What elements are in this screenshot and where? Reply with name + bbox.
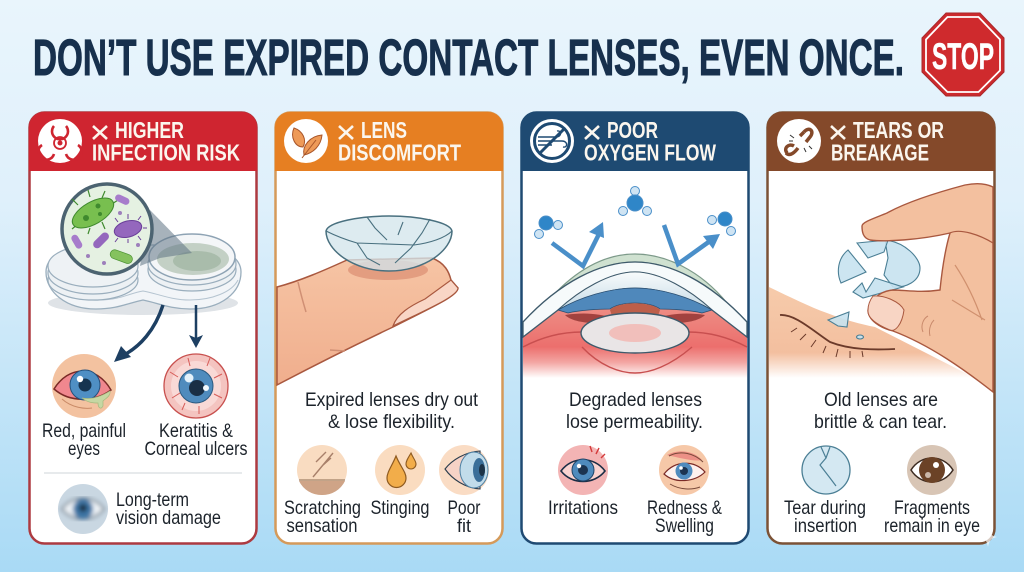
label: scratching sensation: sensation (286, 515, 358, 537)
label: tear during insertion: insertion (794, 515, 857, 537)
heading: tears or breakage (831, 117, 944, 166)
label: long-term vision damage: vision damage (116, 508, 221, 529)
heading: poor oxygen flow (584, 117, 717, 166)
label: poor fit: fit (457, 516, 471, 536)
icon: corner sparkle (979, 527, 997, 547)
panel header: discomfort (275, 112, 503, 171)
label: keratitis and corneal ulcers (144, 420, 248, 460)
arrow: to red eyes (114, 305, 163, 362)
text: expired lenses: & lose flexibility. (328, 411, 455, 433)
icon: blurred vision eye (58, 484, 108, 534)
label: irritations: Irritations (548, 497, 618, 519)
arrow: oxygen deflected right (664, 225, 720, 264)
panel header: oxygen (521, 112, 749, 171)
label: scratching sensation: Scratching (284, 497, 361, 519)
icon: broken chain (777, 119, 821, 163)
arrow: oxygen deflected left (552, 222, 604, 266)
label: long-term vision damage (116, 490, 221, 529)
label: keratitis and corneal ulcers: Corneal ulcers (144, 438, 248, 460)
heading: tears or breakage: TEARS OR (853, 117, 944, 143)
panel: tears or breakage (767, 112, 995, 544)
icon: stinging drops (375, 445, 425, 495)
cracked lens (326, 216, 452, 271)
text: expired lenses (305, 389, 479, 433)
icon: stop sign (922, 13, 1004, 96)
bacteria (68, 190, 147, 265)
label: redness and swelling: Swelling (655, 515, 714, 537)
heading: lens discomfort (338, 117, 461, 166)
heading: tears or breakage: BREAKAGE (831, 140, 929, 166)
label: fragments remain in eye: Fragments (894, 497, 970, 519)
label: scratching sensation (284, 497, 361, 537)
lens fragments (828, 240, 920, 339)
icon: dry leaves (284, 119, 328, 163)
heading: higher infection risk: HIGHER (115, 117, 184, 143)
text: expired lenses: Expired lenses dry out (305, 389, 479, 411)
arrow: to keratitis (189, 305, 203, 348)
text: degraded lenses (566, 389, 703, 433)
illustration: eye cross-section with lens (523, 254, 747, 378)
heading: poor oxygen flow: POOR (607, 117, 658, 143)
label: red, painful eyes: eyes (68, 438, 100, 460)
illustration: fingers holding torn lens (769, 184, 993, 392)
icon: biohazard (38, 119, 82, 163)
heading: poor oxygen flow: OXYGEN FLOW (584, 140, 717, 166)
hand (862, 184, 993, 392)
icon: keratitis eye (164, 354, 228, 418)
illustration: finger with cracked lens (277, 216, 458, 385)
panel: poor oxygen flow (521, 112, 749, 544)
text: degraded lenses: Degraded lenses (569, 389, 702, 411)
icon: swollen eye (659, 445, 709, 495)
panel header: infection (29, 112, 257, 171)
heading: lens discomfort: LENS (361, 117, 407, 143)
icon: no air flow (530, 119, 574, 163)
label: tear during insertion (784, 497, 866, 537)
label: fragments remain in eye: remain in eye (884, 515, 980, 537)
panel header: breakage (767, 112, 995, 171)
icon: scratching (297, 445, 347, 495)
label: long-term vision damage: Long-term (116, 490, 189, 511)
label: red, painful eyes: Red, painful (42, 420, 126, 442)
label: red, painful eyes (42, 420, 126, 460)
text: old lenses (814, 389, 947, 433)
heading: higher infection risk: INFECTION RISK (92, 140, 240, 166)
illustration: contact lens case with bacteria (46, 184, 241, 315)
label: stinging: Stinging (370, 497, 430, 519)
label: keratitis and corneal ulcers: Keratitis & (159, 420, 233, 442)
heading: lens discomfort: DISCOMFORT (338, 140, 461, 166)
icon: torn lens (802, 446, 850, 494)
panel: lens discomfort (275, 112, 503, 544)
label: fragments remain in eye (884, 497, 980, 537)
icon: fragment in eye (907, 445, 957, 495)
text: old lenses: brittle & can tear. (814, 411, 947, 433)
text: degraded lenses: lose permeability. (566, 411, 703, 433)
label: redness and swelling (647, 497, 722, 537)
label: redness and swelling: Redness & (647, 497, 722, 519)
label: poor fit (448, 497, 481, 536)
label: tear during insertion: Tear during (784, 497, 866, 519)
icon: irritated eye (558, 445, 608, 495)
icon: poor fit eye (439, 445, 489, 495)
icon: oxygen molecules (534, 186, 736, 238)
heading: higher infection risk (92, 117, 240, 166)
label: poor fit: Poor (448, 497, 481, 519)
text: old lenses: Old lenses are (824, 389, 938, 411)
panel: higher infection risk (29, 112, 257, 544)
icon: red painful eye (52, 354, 116, 418)
